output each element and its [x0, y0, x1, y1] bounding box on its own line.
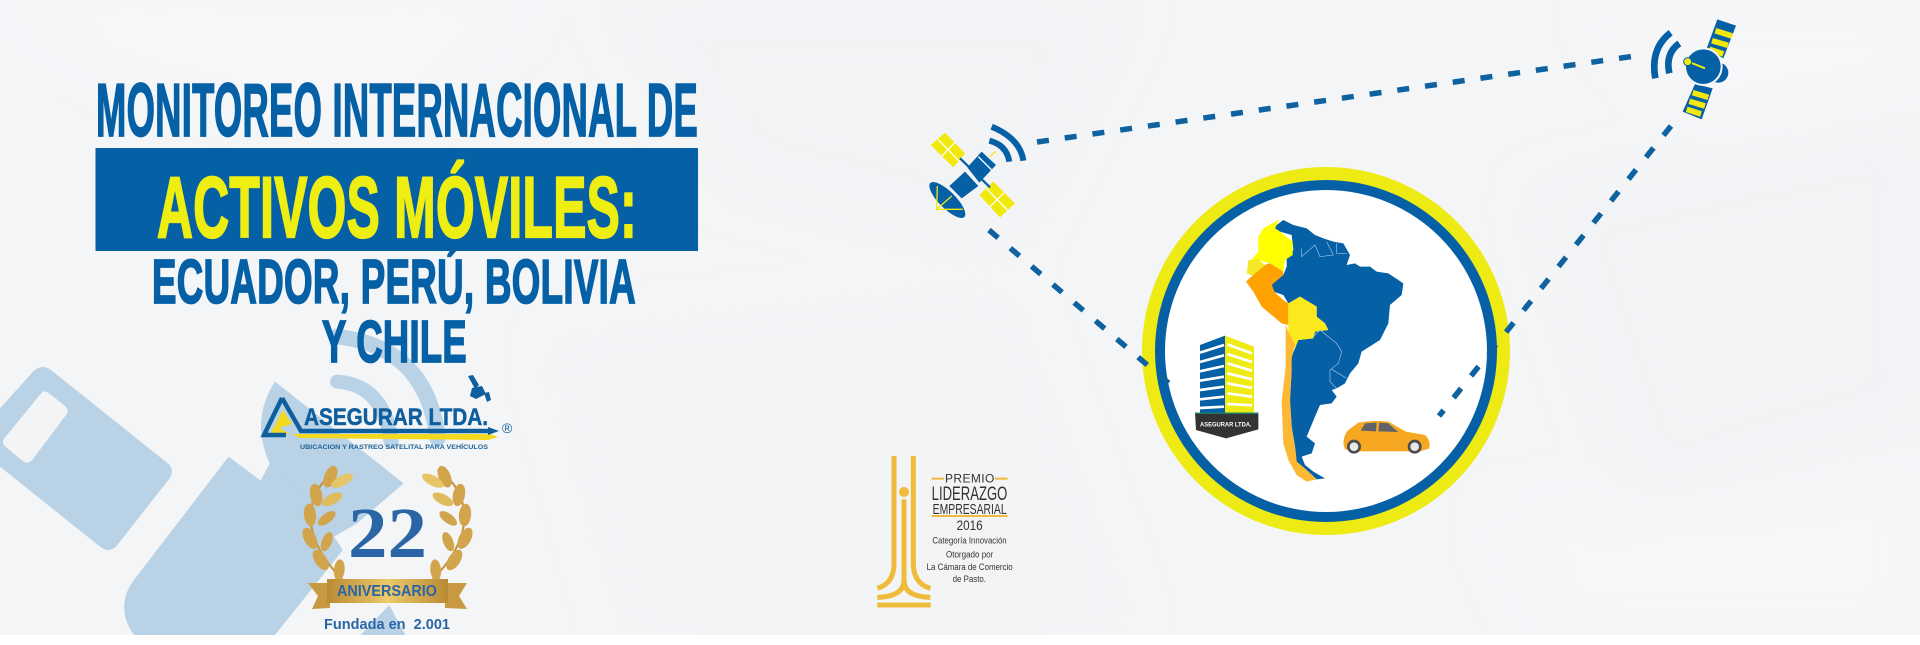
satellite body	[1708, 63, 1728, 83]
dish	[261, 382, 404, 523]
phone body	[124, 457, 357, 635]
solar panels	[1707, 19, 1736, 58]
building logo: ASEGURAR LTDA.	[1200, 423, 1252, 429]
Bolivia	[1288, 297, 1328, 348]
blue countries	[1272, 220, 1403, 479]
icon: left satellite	[924, 127, 1023, 223]
award text: EMPRESARIAL	[933, 502, 1007, 518]
logo name: ASEGURAR LTDA.	[304, 404, 488, 431]
signal arcs	[989, 127, 1023, 162]
icon: right satellite	[1654, 19, 1736, 119]
logo small satellite	[468, 375, 491, 402]
signal arcs	[1654, 33, 1679, 78]
anniversary badge	[299, 464, 476, 633]
award text: 2016	[957, 517, 983, 533]
number 22: 22	[348, 493, 427, 573]
dish	[924, 177, 970, 223]
Colombia	[1248, 219, 1293, 272]
laurel wreath	[299, 464, 476, 581]
award text: Categoría Innovación	[932, 535, 1007, 545]
inner borders	[1302, 242, 1347, 388]
award text: Otorgado por	[946, 549, 993, 559]
map roundel	[1142, 167, 1510, 535]
title	[96, 68, 698, 375]
text: MONITOREO INTERNACIONAL DE	[96, 68, 698, 152]
satellite body	[960, 158, 990, 187]
countries line: ECUADOR, PERÚ, BOLIVIA	[152, 248, 636, 317]
logo: Asegurar Ltda	[264, 375, 513, 451]
award text: LIDERAZGO	[932, 484, 1007, 505]
ribbon label: ANIVERSARIO	[337, 583, 437, 600]
countries line 2: Y CHILE	[322, 309, 467, 375]
phone top	[0, 367, 172, 550]
watermark: phone and satellite dish	[0, 337, 437, 635]
title banner	[96, 148, 698, 256]
founded caption: Fundada en 2.001	[324, 617, 450, 633]
signal waves	[337, 337, 437, 442]
Chile	[1282, 324, 1317, 482]
award text: de Pasto.	[953, 574, 986, 584]
award text	[927, 471, 1013, 584]
registered mark: ®	[502, 420, 513, 436]
roundel rings	[1142, 167, 1510, 535]
base piece	[361, 605, 405, 635]
building base	[1195, 413, 1258, 438]
award text: La Cámara de Comercio	[927, 562, 1013, 572]
award text: PREMIO	[945, 471, 994, 485]
icon: car	[1343, 421, 1430, 454]
map of South America	[1246, 219, 1403, 482]
logo triangle	[270, 410, 292, 434]
solar panels	[931, 133, 965, 167]
phone screen	[3, 391, 68, 463]
logo arrow underline	[292, 434, 498, 440]
icon: building	[1195, 336, 1258, 438]
award emblem	[877, 456, 931, 605]
logo tagline: UBICACION Y RASTREO SATELITAL PARA VEHÍCULOS	[300, 442, 488, 451]
Ecuador	[1247, 259, 1267, 277]
ribbon	[308, 579, 467, 609]
award rules	[932, 479, 1008, 516]
Peru	[1246, 263, 1288, 325]
signal links between satellites and map	[989, 55, 1671, 416]
award: Premio Liderazgo Empresarial	[877, 456, 1013, 605]
highlighted title: ACTIVOS MÓVILES:	[157, 160, 637, 256]
